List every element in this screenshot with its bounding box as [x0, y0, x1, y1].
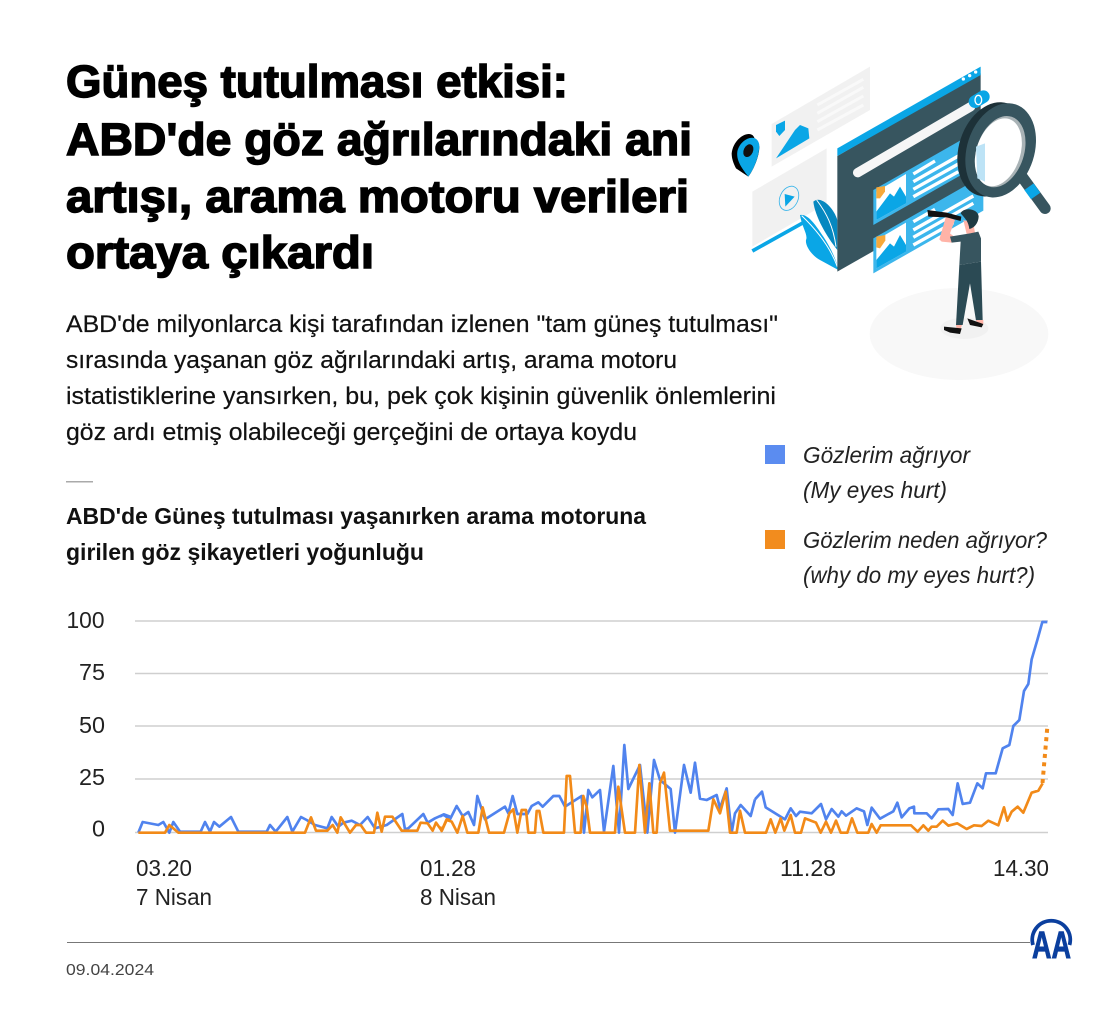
intro text: ABD'de milyonlarca kişi tarafından izlenen "tam güneş tutulması" — [66, 311, 778, 338]
intro text — [66, 311, 778, 446]
x axis labels: 11.28 — [780, 855, 836, 881]
legend: why do my eyes hurt — [765, 527, 1047, 588]
chart heading: girilen göz şikayetleri yoğunluğu — [66, 539, 424, 565]
intro text: istatistiklerine yansırken, bu, pek çok kişinin güvenlik önlemlerini — [66, 383, 776, 410]
logo: AA — [1032, 921, 1071, 967]
x axis labels: 01.28 — [420, 855, 476, 881]
x axis labels: 7 Nisan — [136, 884, 212, 910]
legend: why do my eyes hurt: (why do my eyes hurt?) — [803, 562, 1035, 588]
title: ABD'de göz ağrılarındaki ani — [66, 114, 692, 165]
title: ortaya çıkardı — [66, 227, 374, 278]
floor shadow — [870, 288, 1048, 380]
person with telescope — [927, 209, 988, 339]
leaves — [800, 200, 838, 270]
video panel — [752, 148, 827, 251]
legend: why do my eyes hurt: Gözlerim neden ağrıyor? — [803, 527, 1047, 553]
magnifying glass — [946, 93, 1048, 208]
title: Güneş tutulması etkisi: — [66, 56, 568, 107]
footer rule — [67, 942, 1030, 943]
blue series: my eyes hurt — [138, 622, 1047, 833]
legend: my eyes hurt: (My eyes hurt) — [803, 477, 947, 503]
x axis labels: 03.20 — [136, 855, 192, 881]
legend: my eyes hurt — [765, 442, 971, 503]
map pin — [732, 134, 759, 177]
y axis labels: 100 — [66, 607, 104, 633]
x axis labels: 14.30 — [993, 855, 1049, 881]
browser window — [837, 67, 983, 272]
title — [66, 56, 692, 278]
result card 2 — [873, 176, 983, 273]
y axis labels: 50 — [79, 712, 105, 738]
intro text: sırasında yaşanan göz ağrılarındaki artış, arama motoru — [66, 347, 677, 374]
gray document card — [772, 67, 870, 167]
line chart — [66, 607, 1049, 910]
x axis labels: 8 Nisan — [420, 884, 496, 910]
chart heading: ABD'de Güneş tutulması yaşanırken arama motoruna — [66, 503, 647, 529]
y axis labels: 25 — [79, 764, 105, 790]
date: 09.04.2024 — [66, 962, 154, 979]
y axis labels: 0 — [92, 816, 105, 842]
result card 1 — [873, 127, 983, 225]
orange series: why do my eyes hurt — [138, 725, 1048, 833]
x axis labels — [136, 855, 1049, 910]
intro text: göz ardı etmiş olabileceği gerçeğini de ortaya koydu — [66, 419, 637, 446]
chart heading — [66, 503, 647, 565]
y axis labels — [66, 607, 105, 842]
illustration: person searching the browser with a magnifier — [732, 67, 1048, 380]
title: artışı, arama motoru verileri — [66, 171, 689, 222]
y axis labels: 75 — [79, 659, 105, 685]
logo: AA: AA — [1032, 925, 1071, 967]
legend: my eyes hurt: Gözlerim ağrıyor — [803, 442, 971, 468]
